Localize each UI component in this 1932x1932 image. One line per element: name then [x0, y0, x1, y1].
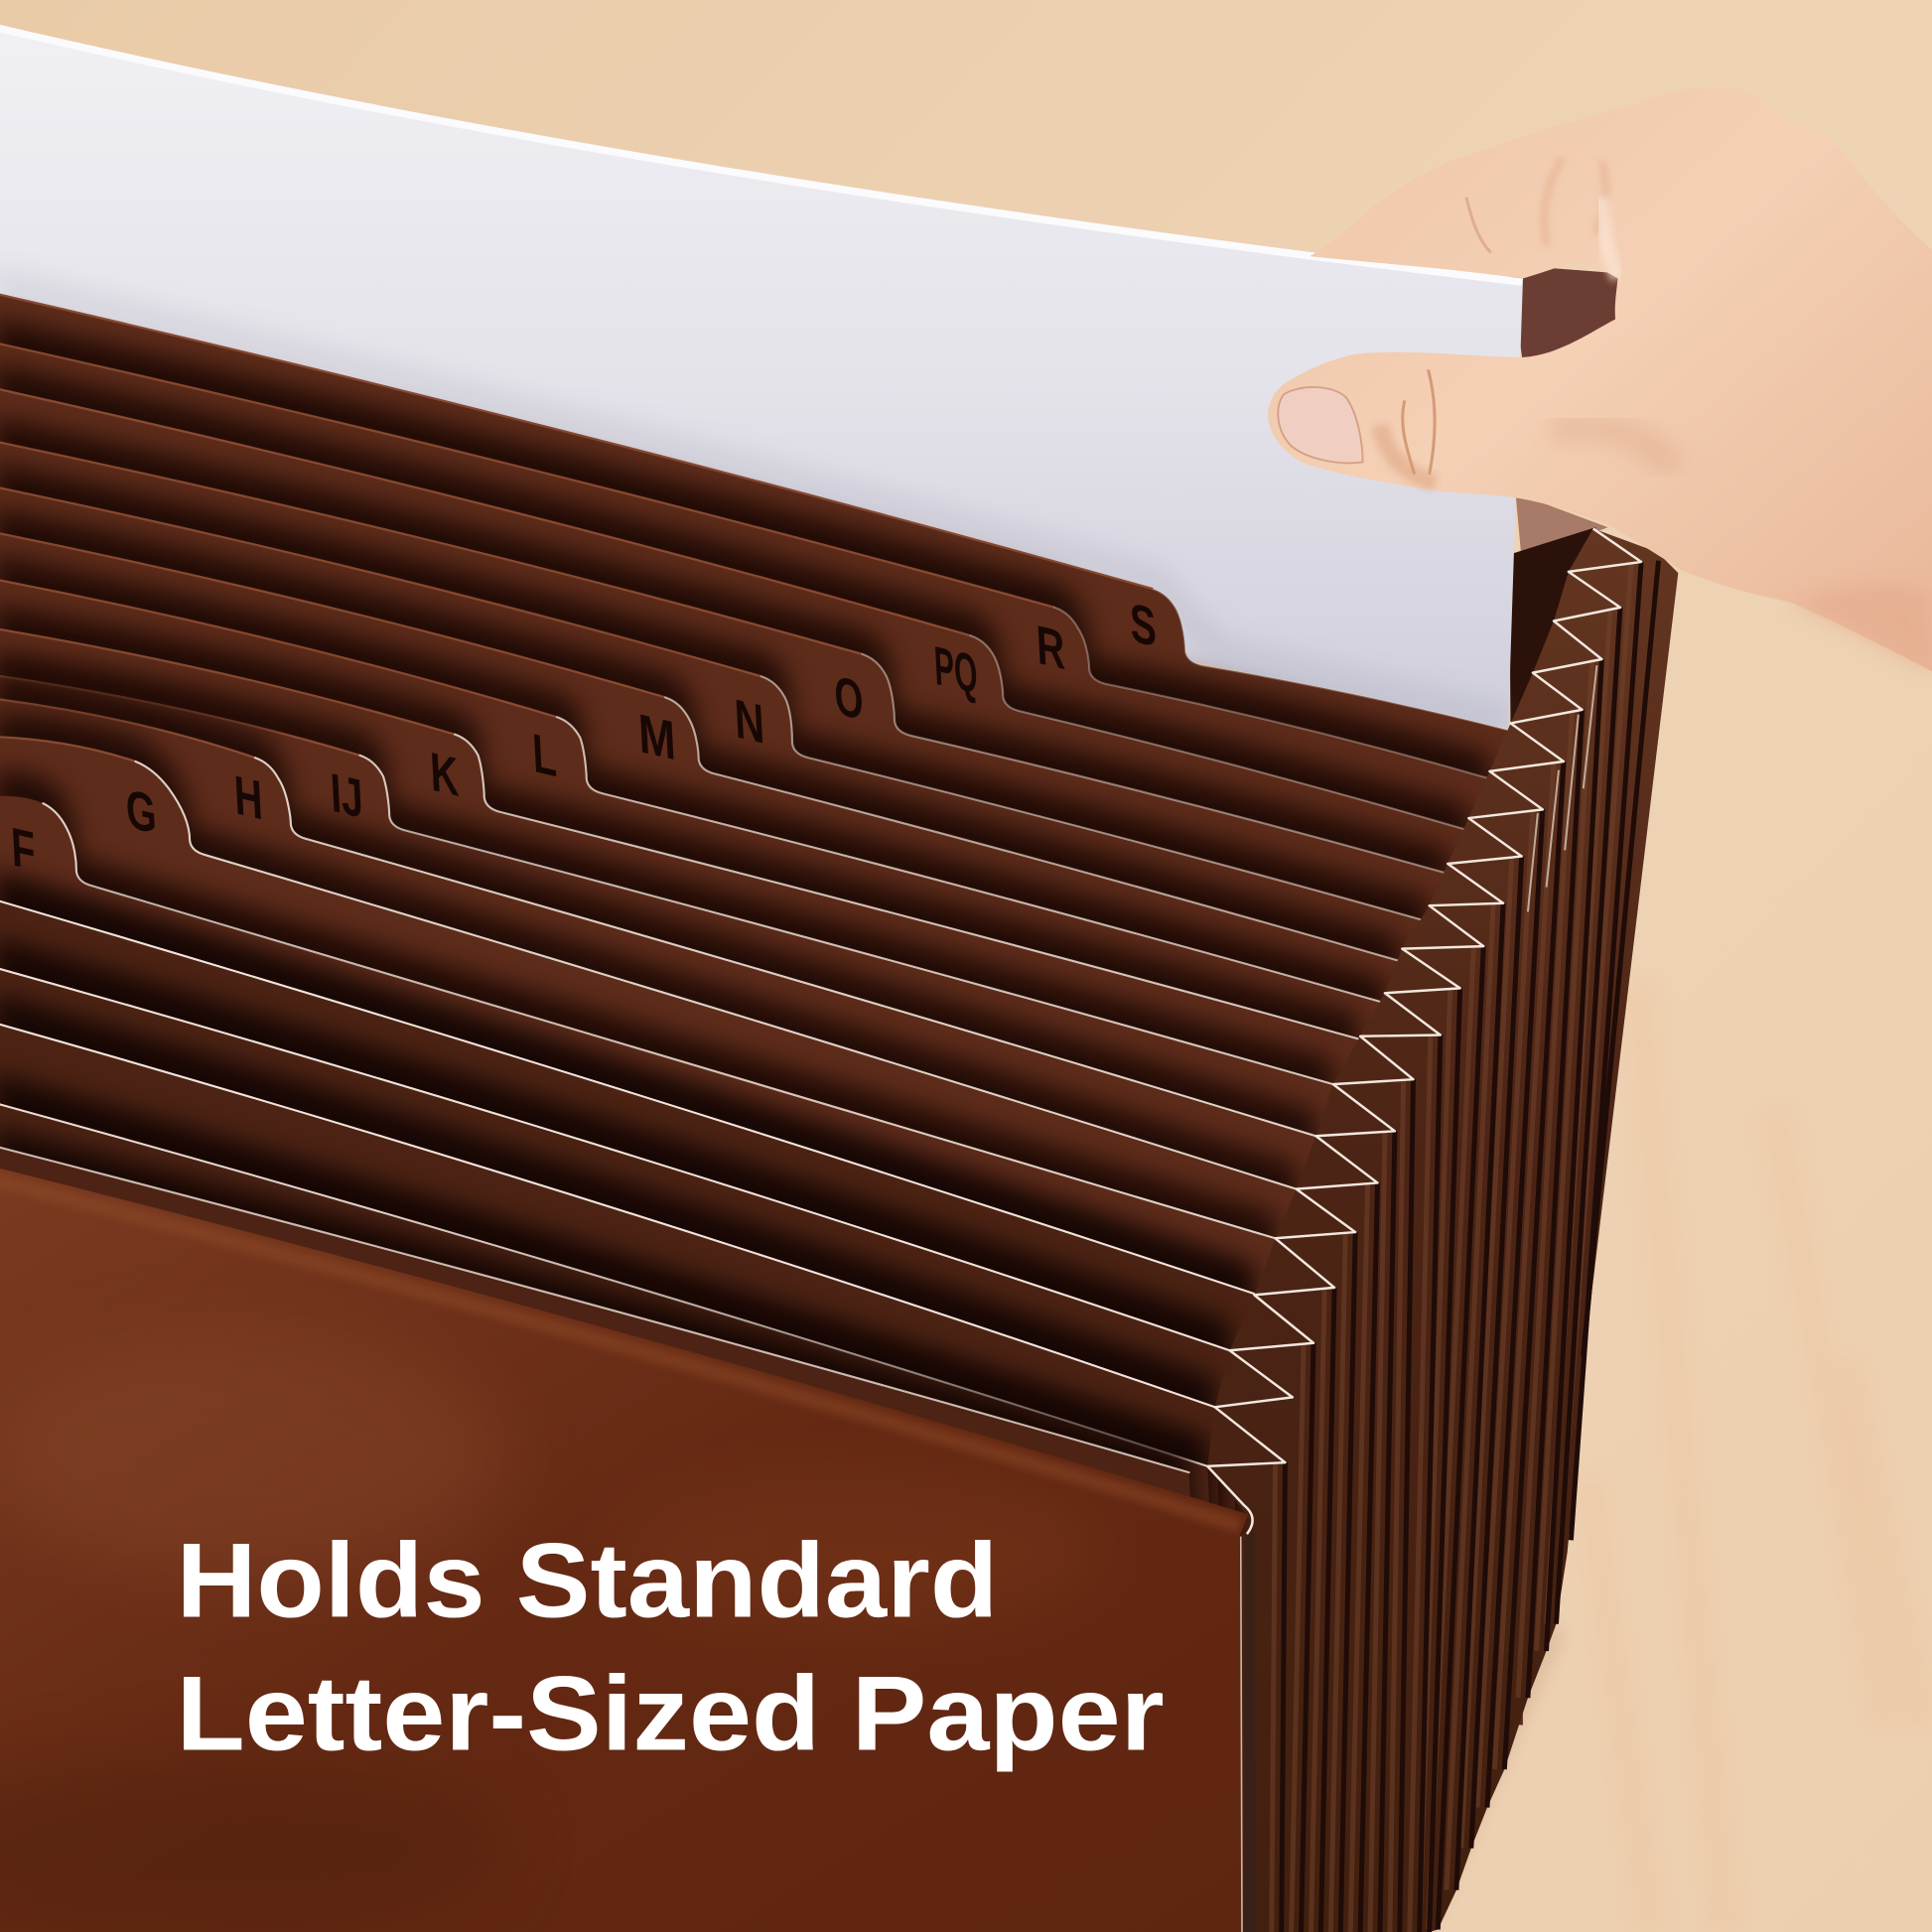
divider tab: PQ: PQ — [932, 634, 979, 706]
divider tab: F: F — [10, 816, 37, 883]
divider tab: F — [0, 771, 1288, 1725]
divider tab: K — [0, 604, 1370, 1725]
hand holding paper — [1268, 86, 1932, 671]
divider tab: H — [0, 674, 1328, 1725]
divider tab: O — [0, 416, 1460, 1725]
headline: Holds Standard Letter-Sized Paper: Letter-Sized Paper — [176, 1653, 1165, 1772]
divider tab: M — [0, 507, 1412, 1725]
accordion gusset pleats — [1207, 528, 1678, 1932]
divider tab: L: L — [531, 723, 558, 789]
divider tab: S — [0, 293, 1523, 1725]
divider tab: R: R — [1035, 615, 1066, 682]
divider tab: G: G — [124, 778, 158, 846]
divider tab: N: N — [733, 688, 766, 756]
divider tab: M: M — [637, 702, 677, 772]
divider tab: O: O — [833, 665, 865, 733]
divider tab: R — [0, 318, 1502, 1725]
divider tab: PQ — [0, 363, 1481, 1725]
headline: Holds Standard Letter-Sized Paper: Holds Standard — [176, 1520, 998, 1639]
divider tab: K: K — [429, 741, 460, 809]
thumbnail — [1278, 387, 1363, 463]
divider tab: G — [0, 712, 1309, 1725]
divider tab: N — [0, 462, 1441, 1725]
divider tab: IJ: IJ — [329, 762, 364, 831]
divider tab: L — [0, 554, 1397, 1725]
headline: Holds Standard Letter-Sized Paper — [176, 1520, 1165, 1772]
dark interior behind fingers and paper — [1509, 265, 1621, 740]
divider tab: IJ — [0, 650, 1345, 1725]
front leather-look cover — [0, 1167, 1256, 1932]
divider tab: H: H — [233, 764, 264, 832]
back divider sheets without visible tabs — [0, 870, 1267, 1725]
stack of white paper — [0, 24, 1523, 730]
divider tab: S: S — [1129, 592, 1158, 659]
